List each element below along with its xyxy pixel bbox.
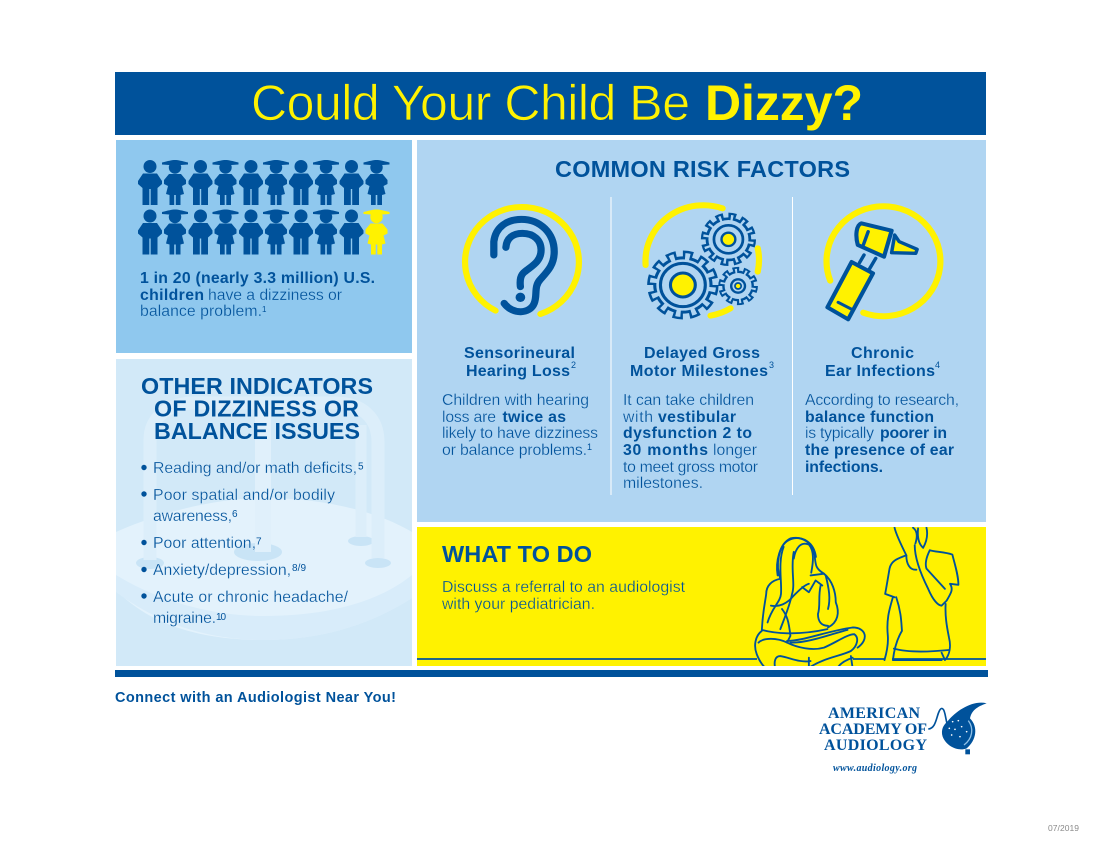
column: chronic ear infections	[805, 345, 959, 476]
bullet list: 7	[256, 536, 262, 548]
column: chronic ear infections: balance function	[805, 409, 934, 426]
column: chronic ear infections: According to research,	[805, 392, 959, 409]
panel: common risk factors	[417, 140, 986, 522]
heading: WHAT TO DO	[442, 541, 592, 567]
icon: otoscope	[827, 206, 940, 319]
bullet list: 10	[216, 612, 226, 623]
background illustration: balance platform	[116, 403, 412, 640]
advice text: Discuss a referral to an audiologist	[442, 579, 686, 596]
logo wordmark: ACADEMY OF	[819, 721, 927, 738]
column: sensorineural hearing loss: loss are	[442, 409, 496, 426]
statistic text: 1 in 20 (nearly 3.3 million) U.S.	[140, 270, 375, 287]
advice text: with your pediatrician.	[441, 596, 595, 613]
column: chronic ear infections: poorer in	[880, 425, 947, 442]
statistic text: 1	[262, 305, 267, 314]
heading: COMMON RISK FACTORS	[555, 156, 850, 182]
column: delayed gross motor milestones: with	[622, 409, 653, 426]
logo wordmark: AMERICAN	[828, 705, 920, 722]
logo wordmark: AUDIOLOGY	[824, 737, 927, 754]
bullet list: awareness,	[153, 508, 232, 525]
column: sensorineural hearing loss: or balance problems.	[442, 442, 587, 459]
bullet list: migraine.	[153, 610, 216, 627]
column: delayed gross motor milestones: dysfunction 2 to	[623, 425, 752, 442]
title text: Dizzy?	[705, 75, 863, 131]
bullet list: 8/9	[292, 563, 306, 574]
column: chronic ear infections: is typically	[805, 425, 874, 442]
heading: BALANCE ISSUES	[154, 418, 360, 444]
column: chronic ear infections: 4	[935, 360, 940, 370]
bullet list: Reading and/or math deficits,	[153, 460, 357, 477]
column: sensorineural hearing loss: Children with hearing	[442, 392, 589, 409]
column: delayed gross motor milestones	[622, 345, 774, 492]
bullet list: Poor spatial and/or bodily	[153, 487, 335, 504]
statistic text	[140, 270, 375, 320]
infographic	[115, 72, 1079, 831]
panel: what to do	[417, 527, 986, 669]
seated girl	[755, 538, 865, 669]
heading: OTHER INDICATORS	[141, 373, 373, 399]
statistic text: have a dizziness or	[208, 287, 342, 304]
icon: ear with question mark	[465, 207, 579, 314]
column: delayed gross motor milestones: 3	[769, 360, 774, 370]
footer call to action: Connect with an Audiologist Near You!	[115, 690, 396, 706]
column: sensorineural hearing loss: twice as	[502, 409, 566, 426]
bullet list: Acute or chronic headache/	[153, 589, 349, 606]
bullet list	[141, 460, 364, 627]
heading: OF DIZZINESS OR	[154, 396, 359, 422]
column: sensorineural hearing loss: 2	[571, 360, 576, 370]
statistic text: balance problem.	[140, 303, 262, 320]
top gear	[704, 216, 753, 263]
column: chronic ear infections: infections.	[805, 459, 883, 476]
panel: other indicators	[116, 359, 412, 666]
column: sensorineural hearing loss: likely to have dizziness	[442, 425, 598, 442]
panel: 1 in 20 statistic	[116, 140, 412, 353]
logo ear mark	[928, 703, 987, 754]
illustration: seated girl and standing boy	[755, 528, 958, 669]
title banner	[115, 72, 986, 135]
column: delayed gross motor milestones: vestibular	[658, 409, 736, 426]
bullet list: 6	[232, 509, 238, 520]
pictogram: twenty children, one highlighted	[138, 160, 390, 254]
column: sensorineural hearing loss	[442, 345, 598, 459]
column: delayed gross motor milestones: Delayed Gross	[644, 345, 760, 362]
icon: gears	[645, 205, 759, 316]
column: chronic ear infections: Chronic	[851, 345, 914, 362]
column: sensorineural hearing loss: Sensorineural	[464, 345, 575, 362]
column: chronic ear infections: Ear Infections	[825, 363, 935, 380]
large gear	[651, 255, 714, 315]
bullet list: Poor attention,	[153, 535, 256, 552]
title text: Could Your Child Be	[251, 75, 690, 131]
column: sensorineural hearing loss: 1	[587, 442, 592, 452]
statistic text: children	[140, 287, 204, 304]
footer rule	[115, 670, 988, 677]
heading	[141, 373, 373, 444]
logo: American Academy of Audiology	[819, 703, 987, 774]
column: delayed gross motor milestones: 30 months	[623, 442, 708, 459]
logo wordmark	[819, 705, 927, 774]
bullet list: Anxiety/depression,	[153, 562, 291, 579]
floor line	[417, 658, 986, 660]
column: delayed gross motor milestones: milestones.	[623, 475, 703, 492]
small gear	[721, 269, 755, 303]
revision date: 07/2019	[1048, 823, 1079, 833]
column: delayed gross motor milestones: to meet gross motor	[623, 459, 758, 476]
column: delayed gross motor milestones: Motor Milestones	[630, 363, 768, 380]
column: sensorineural hearing loss: Hearing Loss	[466, 363, 570, 380]
column: chronic ear infections: the presence of ear	[805, 442, 954, 459]
column: delayed gross motor milestones: longer	[713, 442, 757, 459]
standing boy	[884, 528, 958, 660]
column: delayed gross motor milestones: It can take children	[623, 392, 754, 409]
logo wordmark: www.audiology.org	[833, 763, 917, 774]
bullet list: 5	[358, 462, 364, 472]
advice text	[441, 579, 686, 613]
